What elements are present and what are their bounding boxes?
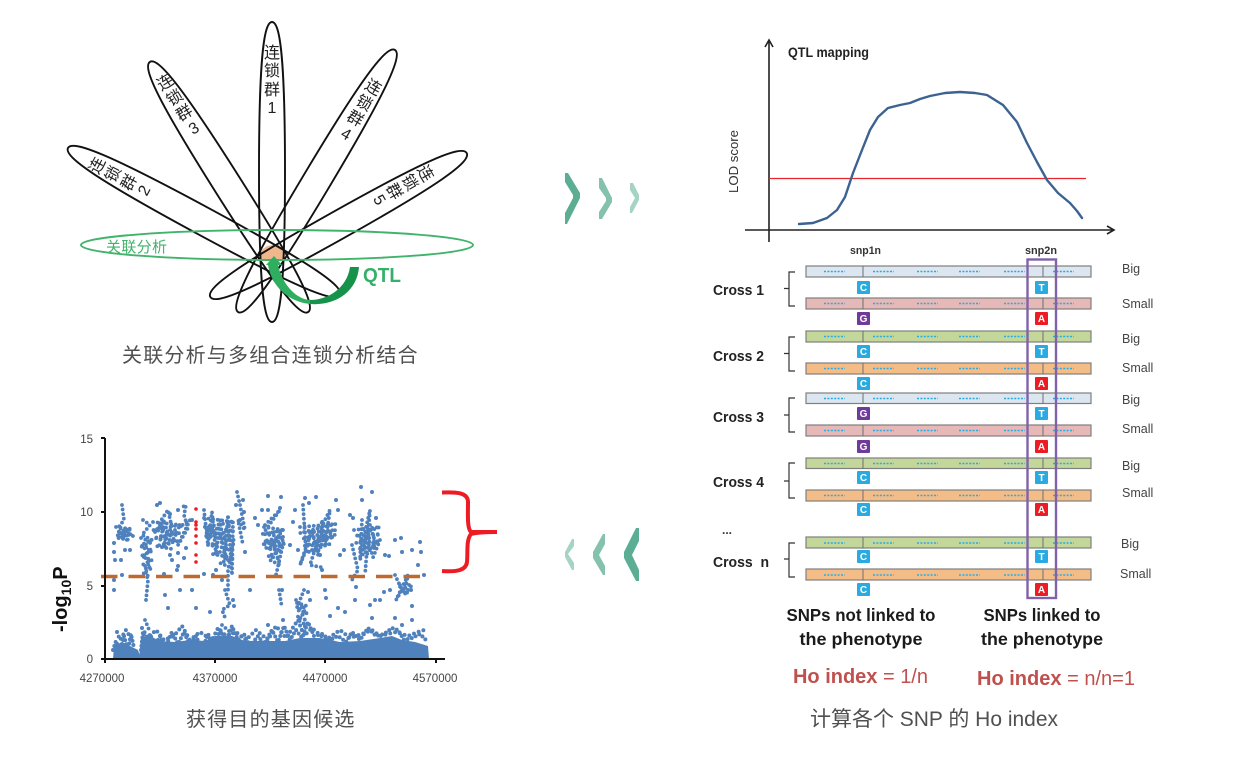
y axis tick labels: 10 [80,507,93,519]
label: linkage group 3: 3 [186,119,203,139]
cross 2: Big [1122,332,1140,346]
label: linkage group 5: 锁 [398,171,421,194]
label: linkage group 1: 锁 [264,62,280,80]
cross 2: Small [1122,361,1153,375]
cross n: Cross n [713,555,769,571]
cross 2: Cross 2 [713,349,764,365]
label: linkage group 4: 锁 [353,91,375,115]
cross 1: Small [1122,297,1153,311]
cross n: C [860,552,867,563]
label: linkage group 3: 锁 [163,86,186,110]
chart: Manhattan plot [50,434,457,685]
label: QTL: QTL [363,265,401,287]
panel: linkage groups and association analysis [61,22,474,322]
scatter: highlighted red points [194,509,198,562]
cross 4 [713,458,1153,516]
cross 1: A [1038,314,1045,325]
cross n [713,537,1151,596]
chart: QTL mapping LOD curve [727,40,1114,242]
association analysis ellipse [81,230,473,260]
y axis title: P [50,566,72,580]
LOD curve [799,92,1082,224]
cross 4: A [1038,505,1045,516]
cross 2: A [1038,379,1045,390]
x axis tick labels: 4470000 [303,673,347,685]
text: Ho index for unlinked SNPs: Ho index = 1/n [793,666,928,688]
cross n: A [1038,585,1045,596]
cross 3: A [1038,442,1045,453]
cross 4: C [860,505,867,516]
cross 1: G [860,314,868,325]
scatter: low significance band [113,620,429,659]
label: linkage group 2: 连 [86,154,109,177]
text: Ho index for linked SNPs: Ho index = n/n=1 [977,668,1135,690]
cross 1: T [1038,283,1045,294]
text: SNPs linked to the phenotype: SNPs linked to [984,605,1100,625]
arrow: QTL curved arrow [266,256,359,304]
y axis title: 10 [58,580,74,595]
cross 1: Cross 1 [713,283,764,299]
y axis tick labels: 5 [87,581,93,593]
cross 4: C [860,473,867,484]
caption: association plus multi-population linkage analysis: 关联分析与多组合连锁分析结合 [122,344,419,367]
label: linkage group 1: 连 [264,44,280,62]
cross 2: C [860,379,867,390]
LOD threshold line [769,178,1086,180]
cross 4: Small [1122,486,1153,500]
y axis tick labels: 15 [80,434,93,446]
label: linkage group 1: 1 [268,100,277,117]
label: snp2n: snp2n [1025,245,1057,257]
cross 1: C [860,283,867,294]
label: linkage group 5: 连 [413,162,437,185]
axes [101,438,445,663]
linkage group ellipses [61,22,474,322]
cross 4: T [1038,473,1045,484]
cross 2 [713,331,1153,390]
label: linkage group 5: 群 [382,180,406,203]
cross n: Big [1121,537,1139,551]
cross 1: Big [1122,262,1140,276]
text: SNPs not linked to the phenotype: the phenotype [800,629,923,649]
y axis tick labels: 0 [87,654,93,666]
label: linkage group 5: 5 [369,192,388,208]
cross 3: G [860,409,868,420]
x axis tick labels [80,673,457,685]
cross 2: T [1038,347,1045,358]
icon: red brace [442,492,497,571]
label: linkage group 3: 连 [154,71,177,95]
cross 3: G [860,442,868,453]
label: linkage group 2: 群 [118,171,141,194]
x axis tick labels: 4570000 [413,673,457,685]
label: linkage group 4: 群 [344,107,366,131]
cross 3: Small [1122,422,1153,436]
threshold dashed line [101,575,421,578]
scatter: dense upper clusters [116,492,412,632]
ellipsis between crosses: ... [722,523,732,537]
cross 3: T [1038,409,1045,420]
cross n: Small [1120,567,1151,581]
highlighted overlap region [259,244,285,260]
y axis title: LOD score [727,130,741,193]
cross 3: Cross 3 [713,410,764,426]
caption: compute Ho index of each SNP: 计算各个 SNP 的 Ho index [810,708,1058,731]
chart title: QTL mapping [788,45,869,60]
cross 1 [713,262,1153,325]
cross 2: C [860,347,867,358]
label: snp1n: snp1n [850,245,881,257]
cross n: T [1038,552,1045,563]
y axis title: -log [50,595,72,632]
label: association analysis: 关联分析 [106,239,167,256]
cross 3 [713,393,1153,453]
text: SNPs linked to the phenotype: the phenotype [981,629,1103,649]
cross 3: Big [1122,393,1140,407]
label: linkage group 2: 2 [135,183,154,199]
x axis tick labels: 4370000 [193,673,237,685]
highlight box around snp2n [1028,260,1056,598]
label: linkage group 4: 4 [338,125,354,145]
y axis tick labels [80,434,93,666]
icon: right chevrons [565,173,639,224]
caption: candidate genes obtained: 获得目的基因候选 [186,708,356,731]
label: linkage group 1: 群 [264,81,280,99]
text: SNPs not linked to the phenotype: SNPs not linked to [786,605,936,625]
cross n: C [860,585,867,596]
panel: SNP comparison across crosses [713,245,1153,598]
cross 4: Cross 4 [713,475,764,491]
label: linkage group 2: 锁 [102,163,125,185]
label: linkage group 3: 群 [173,101,196,125]
x axis tick labels: 4270000 [80,673,124,685]
icon: left chevrons [565,528,639,581]
label: linkage group 4: 连 [362,76,384,99]
scatter: sparse points [114,487,424,655]
cross 4: Big [1122,459,1140,473]
axes with arrows [745,40,1114,242]
